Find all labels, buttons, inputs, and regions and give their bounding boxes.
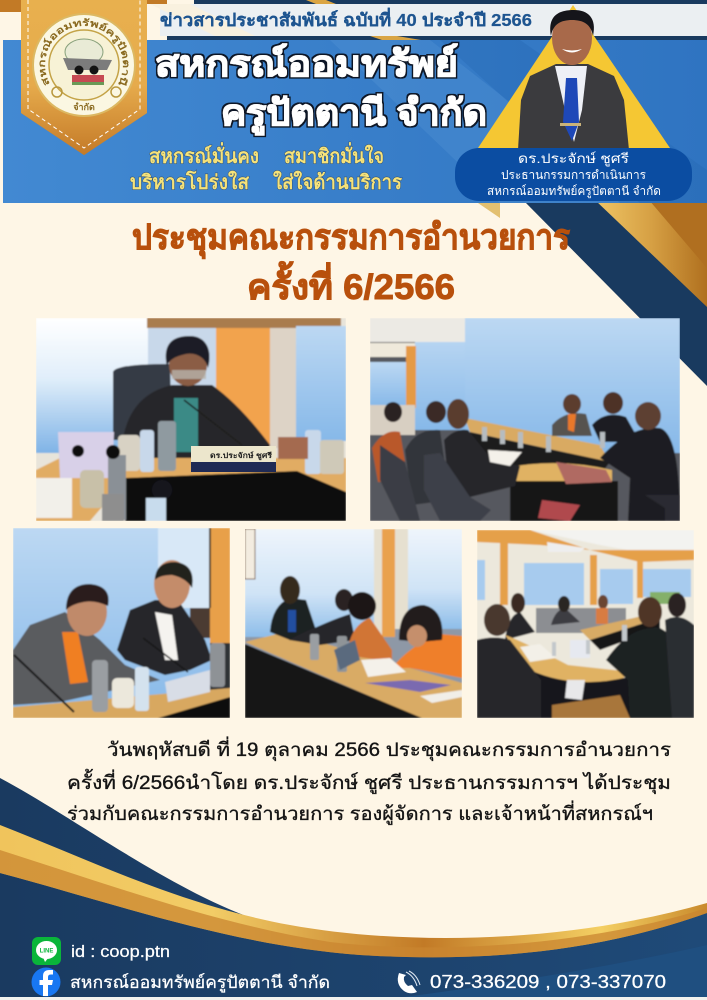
chairman name plate: ดร.ประจักษ์ ชูศรี	[518, 151, 629, 167]
yellow triangle	[478, 5, 670, 148]
desk name sign: ดร.ประจักษ์ ชูศรี	[210, 451, 273, 461]
header banner	[0, 0, 707, 203]
slogans: สหกรณ์มั่นคง	[149, 141, 259, 168]
desk name sign	[191, 446, 276, 472]
icon: telephone	[398, 971, 420, 993]
icon: LINE	[32, 937, 61, 965]
cooperative name heading: ครูปัตตานี จำกัด	[221, 92, 487, 136]
cooperative name heading	[155, 43, 487, 136]
LINE id: id : coop.ptn	[71, 942, 170, 961]
chairman name plate: สหกรณ์ออมทรัพย์ครูปัตตานี จำกัด	[487, 184, 661, 199]
newsletter issue line: ข่าวสารประชาสัมพันธ์ ฉบับที่ 40 ประจำปี 2566	[160, 7, 532, 30]
photo: meeting room from other end	[477, 530, 694, 718]
seal emblem	[52, 39, 121, 97]
body paragraph: ครั้งที่ 6/2566นำโดย ดร.ประจักษ์ ชูศรี ประธานกรรมการฯ ได้ประชุม	[67, 769, 671, 795]
photo: two committee members	[13, 528, 230, 718]
bottom wave decoration	[0, 778, 707, 1000]
slogans: บริหารโปร่งใส	[130, 170, 250, 194]
blue panel	[3, 40, 707, 203]
seal circular name: สหกรณ์ออมทรัพย์ครูปัตตานี	[40, 18, 129, 86]
body paragraph: วันพฤหัสบดี ที่ 19 ตุลาคม 2566 ประชุมคณะกรรมการอำนวยการ	[107, 736, 671, 762]
chairman name plate	[455, 148, 692, 201]
chairman name plate: ประธานกรรมการดำเนินการ	[501, 168, 647, 182]
photo: committee members along table	[245, 529, 462, 718]
slogans: สมาชิกมั่นใจ	[284, 141, 384, 168]
top right corner decoration	[478, 200, 707, 386]
cooperative name heading: สหกรณ์ออมทรัพย์	[155, 43, 458, 84]
seal lower label: จำกัด	[73, 102, 95, 112]
main title	[132, 218, 570, 307]
portrait of chairman	[518, 10, 629, 150]
top ribbon strip	[0, 0, 707, 40]
main title: ประชุมคณะกรรมการอำนวยการ	[132, 218, 570, 259]
gold ribbon with seal	[0, 0, 167, 155]
Facebook page name: สหกรณ์ออมทรัพย์ครูปัตตานี จำกัด	[70, 973, 330, 993]
slogans: ใส่ใจด้านบริการ	[273, 170, 402, 194]
slogans	[130, 141, 402, 194]
main title: ครั้งที่ 6/2566	[247, 261, 455, 307]
footer contacts	[32, 937, 666, 996]
phone numbers: 073-336209 , 073-337070	[430, 972, 666, 992]
icon: Facebook	[32, 968, 60, 996]
photo: chairman at desk	[36, 318, 346, 521]
body paragraph	[67, 736, 671, 825]
icon: LINE: LINE	[40, 948, 53, 954]
photo: meeting room wide	[370, 318, 680, 521]
body paragraph: ร่วมกับคณะกรรมการอำนวยการ รองผู้จัดการ และเจ้าหน้าที่สหกรณ์ฯ	[67, 800, 653, 825]
